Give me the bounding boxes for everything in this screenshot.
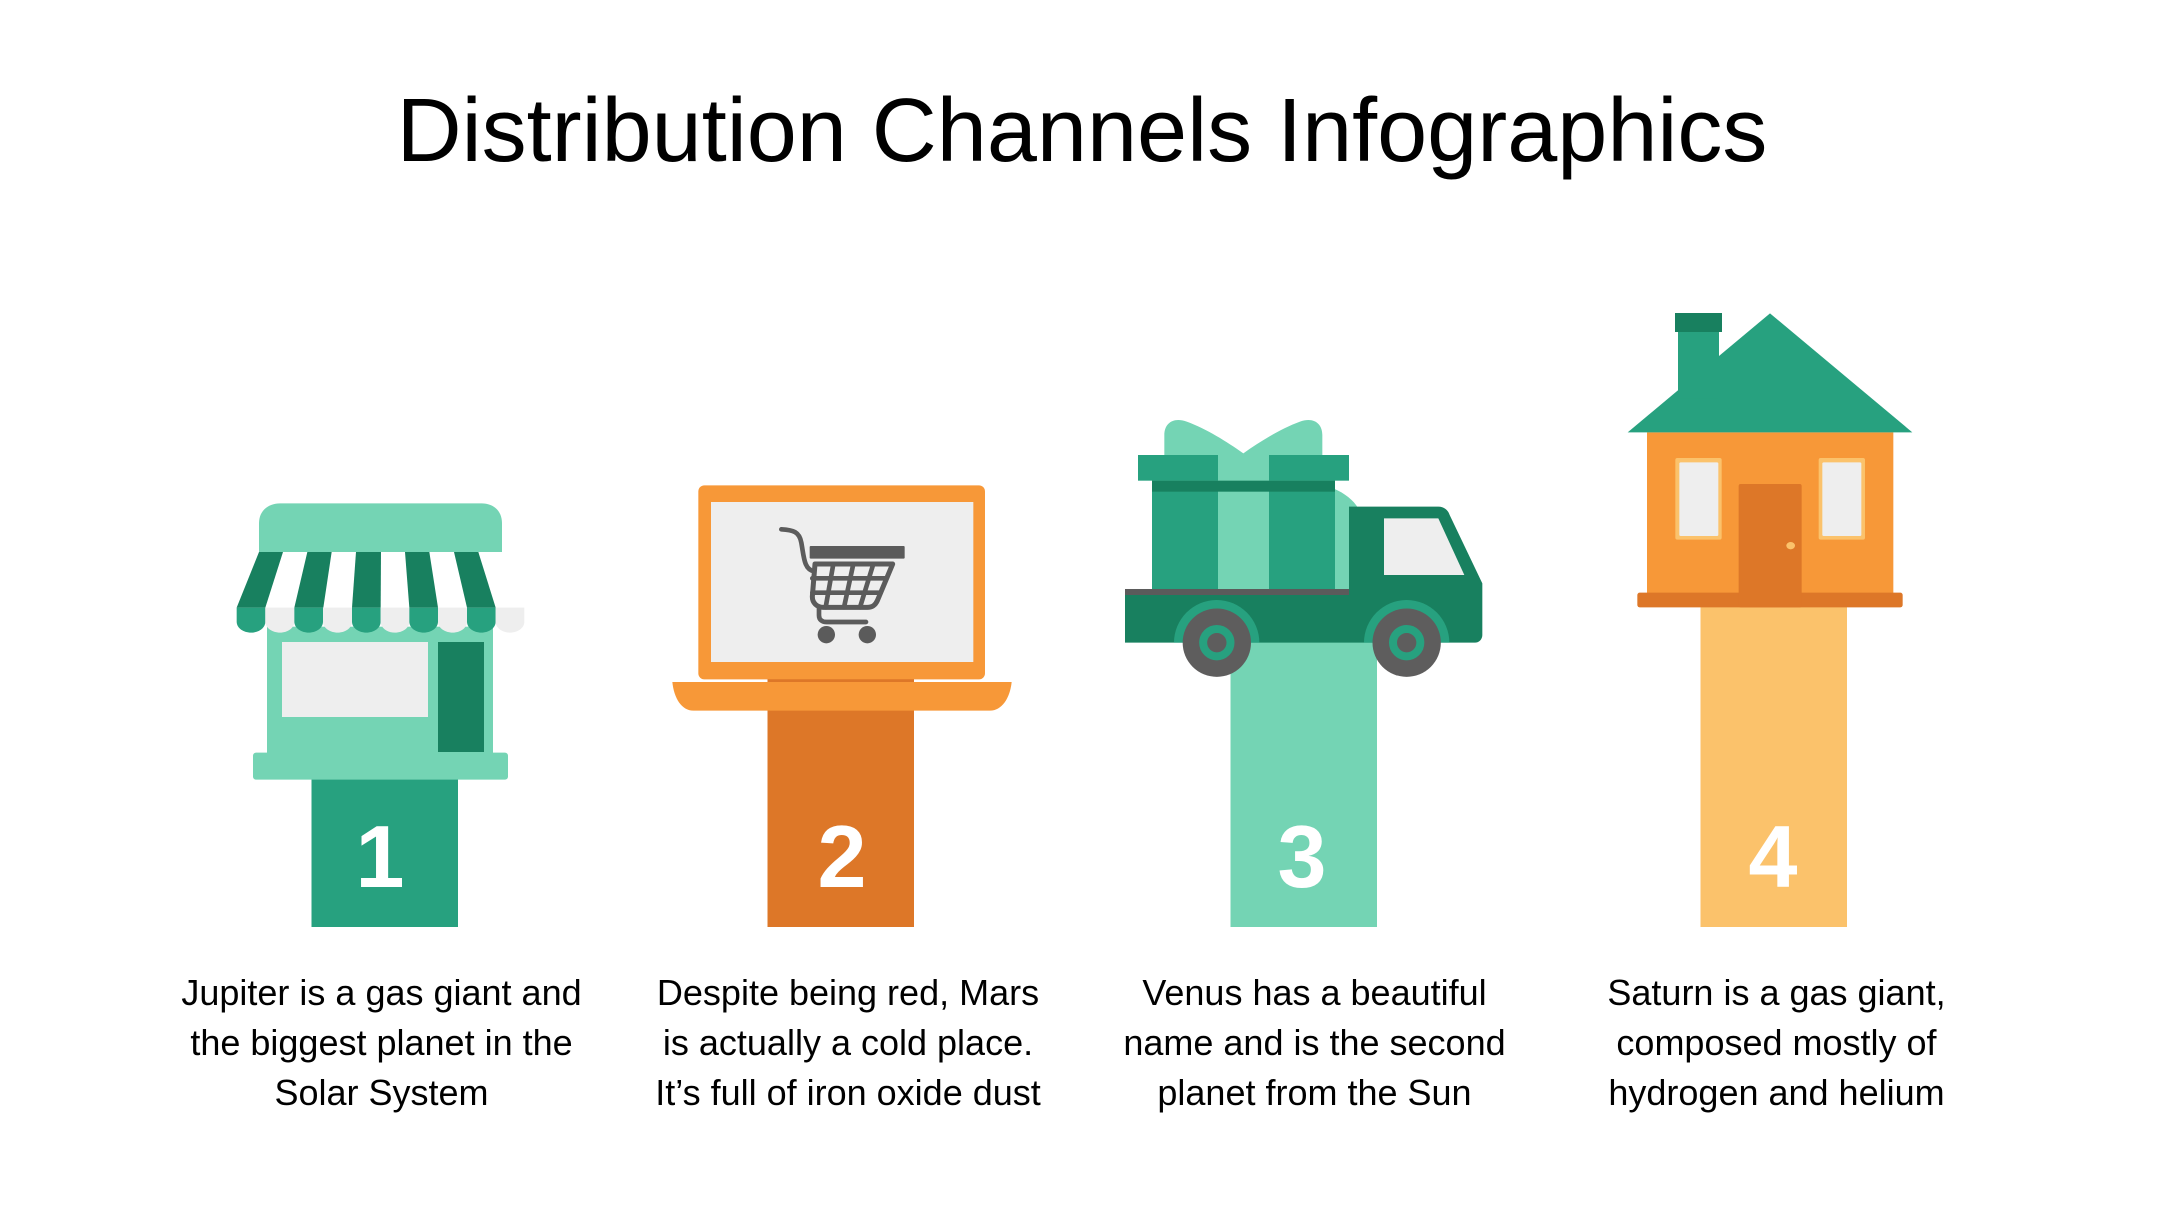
number 1: 1 [356, 807, 404, 906]
panel: channel 1 store [181, 503, 582, 1113]
number 2: 2 [818, 807, 866, 906]
icon: laptop with cart [672, 485, 1012, 711]
description 1: the biggest planet in the [190, 1022, 573, 1063]
description 2: is actually a cold place. [663, 1022, 1033, 1063]
description 2: It’s full of iron oxide dust [655, 1072, 1041, 1113]
description 4: composed mostly of [1616, 1022, 1938, 1063]
icon: delivery truck with gift [1125, 420, 1482, 677]
description 4: hydrogen and helium [1608, 1072, 1945, 1113]
description 3: Venus has a beautiful [1142, 972, 1487, 1013]
panel: channel 4 home [1607, 313, 1946, 1113]
description 1: Solar System [274, 1072, 489, 1113]
description 4: Saturn is a gas giant, [1607, 972, 1946, 1013]
panel: channel 2 online [655, 485, 1041, 1113]
pillar 2 [768, 679, 914, 927]
description 1: Jupiter is a gas giant and [181, 972, 582, 1013]
pillar 1 [312, 779, 458, 927]
description 3: planet from the Sun [1157, 1072, 1472, 1113]
description 3: name and is the second [1123, 1022, 1506, 1063]
description 2: Despite being red, Mars [657, 972, 1039, 1013]
icon: house [1628, 313, 1912, 607]
number 3: 3 [1278, 807, 1326, 906]
icon: shopping cart [781, 529, 905, 643]
number 4: 4 [1749, 807, 1798, 906]
title: Distribution Channels Infographics [397, 81, 1767, 181]
panel: channel 3 delivery [1123, 420, 1506, 1113]
pillar 4 [1700, 607, 1847, 927]
icon: store [237, 503, 524, 780]
pillar 3 [1230, 640, 1377, 927]
